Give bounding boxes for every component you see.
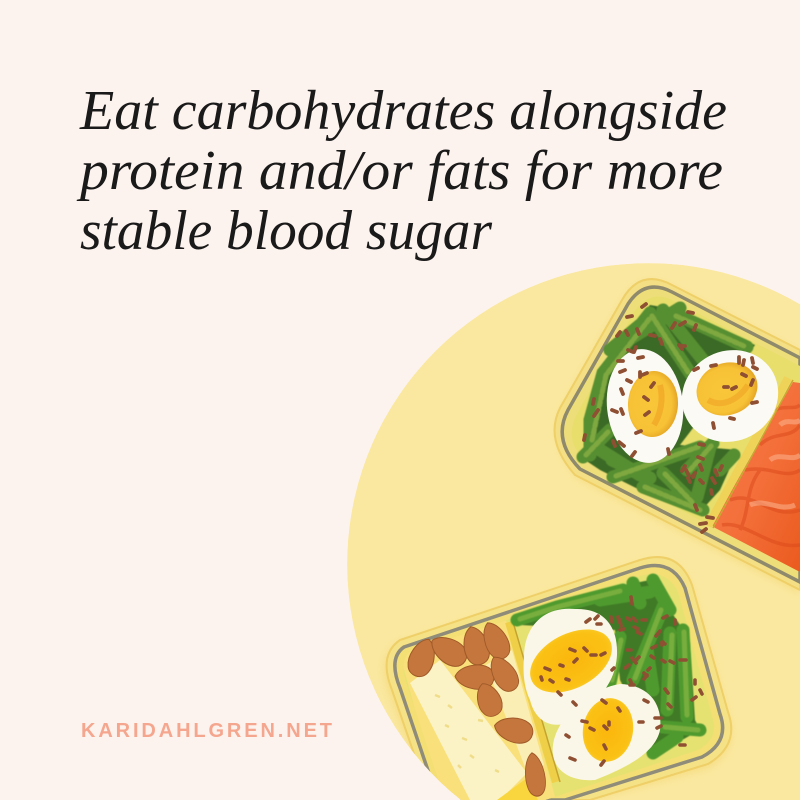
yellow circle with meal prep photo xyxy=(347,263,800,800)
container glass and base xyxy=(555,279,800,593)
headline xyxy=(76,80,727,262)
boiled egg right xyxy=(682,350,778,442)
container glass and base xyxy=(385,557,731,800)
headline: stable blood sugar xyxy=(80,200,492,262)
yellow circle xyxy=(347,263,800,800)
flax seeds xyxy=(541,597,702,765)
left compartment xyxy=(400,620,556,800)
salmon xyxy=(712,382,800,575)
divider xyxy=(708,378,788,526)
almonds xyxy=(404,618,548,797)
headline: Eat carbohydrates alongside xyxy=(79,80,727,142)
meal container: almonds, cheese, poached eggs and asparagus xyxy=(385,557,731,800)
poached egg lower xyxy=(553,684,660,780)
poached egg upper xyxy=(519,609,623,725)
cheese xyxy=(410,650,544,800)
divider xyxy=(509,622,556,782)
asparagus xyxy=(583,305,755,512)
meal container: eggs, asparagus and salmon xyxy=(555,279,800,593)
website credit: KARIDAHLGREN.NET xyxy=(81,720,332,742)
flax seeds xyxy=(584,304,757,532)
boiled egg left xyxy=(606,349,684,463)
asparagus xyxy=(517,580,700,755)
headline: protein and/or fats for more xyxy=(76,140,723,202)
